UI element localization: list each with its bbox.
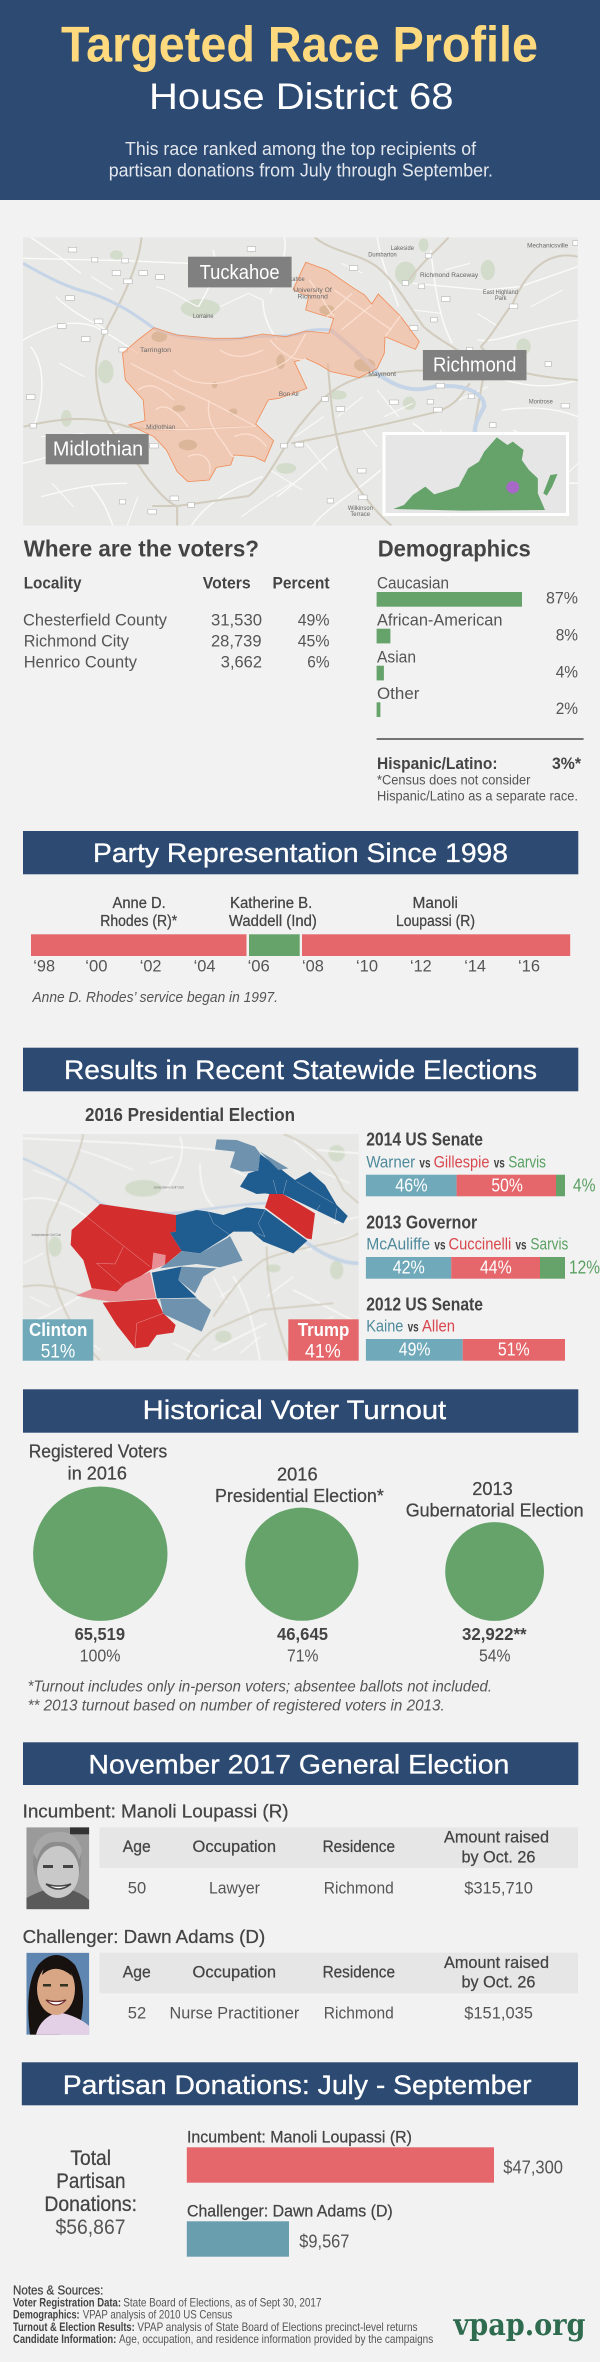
bar: challenger: Challenger: Dawn Adams (D)	[187, 2203, 393, 2221]
table header: by Oct. 26	[462, 1974, 535, 1992]
bubble: registered voters	[29, 1442, 168, 1666]
table header	[100, 1827, 578, 1868]
result: 2013 Governor: 2013 Governor	[366, 1212, 477, 1232]
map place names	[140, 243, 568, 518]
year axis: ‘10	[356, 957, 378, 976]
district outline	[122, 262, 419, 482]
map label: Richmond: Richmond	[433, 355, 516, 377]
map label: Richmond	[423, 350, 526, 380]
bubble: 2013 gubernatorial turnout: 54%	[479, 1646, 510, 1666]
bubble: 2016 presidential turnout: Presidential Election*	[215, 1486, 384, 1506]
map place names: East Highland	[483, 289, 518, 296]
bubble: registered voters: 100%	[80, 1646, 120, 1666]
notes and sources: Demographics:	[13, 2310, 80, 2322]
map place names: Montrose	[529, 399, 553, 406]
section heading: voter turnout: Historical Voter Turnout	[143, 1395, 447, 1425]
stacked bar: 49%	[399, 1340, 430, 1360]
inset: Virginia locator map	[384, 434, 568, 514]
table values: 50	[128, 1879, 146, 1897]
timeline chart: party representation	[31, 895, 570, 1006]
table rows: 6%	[307, 654, 330, 672]
map label: Tuckahoe: Tuckahoe	[200, 262, 280, 284]
total partisan donations: Total	[70, 2147, 111, 2170]
table header: Amount raised	[444, 1954, 549, 1972]
Hispanic/Latino note: 3%*	[552, 755, 582, 773]
section heading: statewide elections: Results in Recent Statewide Elections	[64, 1055, 537, 1085]
notes and sources: Candidate Information:	[13, 2334, 116, 2346]
map label: Midlothian: Midlothian	[53, 439, 143, 461]
table values: Lawyer	[209, 1879, 260, 1897]
candidates: vs	[419, 1154, 431, 1170]
map place names: Mechanicsville	[527, 243, 568, 250]
table rows: 45%	[298, 633, 330, 651]
Clinton result box: Clinton	[29, 1320, 87, 1340]
officeholder names: Manoli	[412, 895, 458, 912]
table values: $151,035	[464, 2005, 533, 2023]
total partisan donations	[44, 2147, 137, 2239]
table header	[24, 575, 330, 593]
year axis: ‘02	[140, 957, 162, 976]
section heading: voter turnout	[23, 1389, 578, 1433]
table values: Richmond	[324, 1879, 394, 1897]
candidate name: Challenger: Dawn Adams (D)	[23, 1926, 265, 1947]
map places: Independence Golf Club	[32, 1232, 62, 1237]
map place names: Lorraine	[193, 313, 214, 320]
year axis: ‘16	[518, 957, 540, 976]
Trump result box: 41%	[305, 1341, 341, 1362]
result: 2012 US Senate: 2012 US Senate	[366, 1294, 483, 1314]
bar chart: race: Asian	[377, 648, 416, 666]
notes and sources: Turnout & Election Results:	[13, 2322, 135, 2334]
table header: Percent	[272, 575, 330, 593]
notes and sources: Age, occupation, and residence information provided by the campaigns	[119, 2332, 433, 2346]
notes and sources: State Board of Elections, as of Sept 30, 2017	[123, 2295, 322, 2309]
total partisan donations: $56,867	[56, 2216, 126, 2239]
bubble: 2016 presidential turnout: 2016	[277, 1465, 318, 1485]
stacked bar	[366, 1339, 565, 1361]
notes and sources: Notes & Sources:	[13, 2283, 103, 2297]
candidates: vs	[516, 1237, 527, 1253]
officeholder names: Waddell (Ind)	[229, 913, 317, 930]
candidates: vs	[434, 1237, 446, 1253]
year axis: ‘00	[85, 957, 108, 976]
table header: Voters	[203, 575, 251, 593]
candidates: Kaine	[366, 1317, 403, 1336]
heading: Where are the voters?	[24, 536, 259, 562]
timeline bars	[31, 934, 570, 956]
map place names: Maymont	[368, 371, 396, 378]
map place names: Park	[495, 295, 507, 302]
table rows: 28,739	[211, 633, 262, 651]
bar chart: race: 87%	[546, 589, 578, 607]
section heading: statewide elections	[23, 1048, 578, 1091]
table values	[128, 1879, 533, 1897]
bubble: registered voters: 65,519	[75, 1624, 125, 1644]
officeholder names: Katherine B.	[230, 895, 312, 912]
map place names: Tuckahoe	[281, 276, 305, 283]
map place names: Dumbarton	[368, 252, 397, 259]
logo: vpap.org: vpap.org	[453, 2308, 586, 2343]
bar: incumbent: Incumbent: Manoli Loupassi (R)	[187, 2129, 412, 2147]
stacked bar: 50%	[491, 1175, 523, 1195]
turnout footnotes: *Turnout includes only in-person voters; absentee ballots not included.	[28, 1678, 492, 1695]
candidates: vs	[408, 1319, 419, 1335]
footnote: Anne D. Rhodes’ service began in 1997.	[32, 989, 278, 1006]
officeholder names	[100, 895, 475, 930]
year axis: ‘08	[302, 957, 324, 976]
bar chart: race	[377, 574, 578, 718]
map place names: Richmond	[297, 294, 328, 301]
Virginia shape	[393, 437, 557, 511]
candidates: Sarvis	[508, 1152, 546, 1171]
result: 2014 US Senate	[366, 1129, 596, 1196]
bubble: 2013 gubernatorial turnout: Gubernatorial Election	[406, 1500, 584, 1520]
district map	[23, 237, 578, 526]
table values: 52	[128, 2005, 146, 2023]
bar chart: partisan donations	[187, 2129, 563, 2257]
notes and sources: VPAP analysis of State Board of Elections precinct-level returns	[137, 2320, 418, 2334]
icon: incumbent portrait	[26, 1827, 89, 1909]
table header: Amount raised	[444, 1829, 549, 1847]
stacked bar	[366, 1257, 600, 1279]
bar chart: race: 8%	[556, 626, 578, 644]
intro text	[109, 138, 493, 180]
map places	[32, 1185, 185, 1237]
table rows: Henrico County	[24, 654, 138, 672]
Clinton-leaning precincts	[152, 1139, 348, 1332]
Trump-leaning precincts	[71, 1194, 315, 1348]
table header: Occupation	[192, 1838, 276, 1856]
candidates	[366, 1152, 546, 1171]
map label: Tuckahoe	[188, 257, 292, 287]
table values	[128, 2005, 533, 2023]
table header	[100, 1953, 578, 1993]
table rows: 49%	[298, 611, 330, 629]
table header: Age	[123, 1838, 151, 1856]
panel: where are the voters	[23, 536, 330, 672]
bubble: 2013 gubernatorial turnout: 32,922**	[462, 1624, 527, 1644]
map label: Midlothian	[46, 434, 149, 464]
table rows: 3,662	[221, 654, 262, 672]
panel: demographics	[377, 536, 584, 803]
candidates	[366, 1317, 455, 1336]
title: Targeted Race Profile	[61, 16, 538, 72]
map places: Jamestown Golf Club	[153, 1185, 185, 1190]
officeholder names: Loupassi (R)	[396, 913, 475, 930]
subtitle: district: House District 68	[149, 76, 454, 117]
total partisan donations: Partisan	[56, 2170, 125, 2193]
notes and sources: Voter Registration Data:	[13, 2297, 121, 2309]
heading: 2016 presidential election: 2016 Presidential Election	[85, 1104, 295, 1125]
year axis: ‘04	[194, 957, 216, 976]
bar: challenger	[187, 2203, 393, 2257]
candidate: incumbent	[23, 1801, 578, 1909]
stacked bar: 51%	[498, 1340, 530, 1360]
result: 2012 US Senate	[366, 1294, 565, 1361]
candidates: vs	[494, 1154, 505, 1170]
officeholder names: Rhodes (R)*	[100, 913, 177, 930]
Hispanic/Latino note	[377, 755, 582, 803]
candidate: challenger	[23, 1926, 578, 2035]
total partisan donations: Donations:	[44, 2193, 137, 2216]
notes and sources: VPAP analysis of 2010 US Census	[83, 2308, 232, 2322]
bubble: registered voters: Registered Voters	[29, 1442, 167, 1462]
precinct boundaries	[87, 1180, 337, 1348]
map place names: Terrace	[350, 511, 370, 518]
map place names: Wilkinson	[348, 505, 373, 512]
stacked bar: 44%	[480, 1258, 512, 1278]
candidates: Gillespie	[434, 1152, 490, 1171]
table header: Age	[123, 1964, 151, 1982]
map place names: University Of	[293, 287, 332, 294]
section heading: party representation: Party Representation Since 1998	[93, 838, 508, 868]
district marker	[506, 481, 519, 493]
Trump result box: Trump	[298, 1320, 349, 1340]
map place names: Lakeside	[391, 245, 414, 252]
Clinton result box	[23, 1319, 93, 1362]
section heading: general election	[23, 1742, 578, 1785]
year axis: ‘14	[464, 957, 486, 976]
table rows: Chesterfield County	[23, 611, 168, 629]
turnout footnotes	[28, 1678, 492, 1715]
table header: Residence	[323, 1838, 395, 1856]
section heading: partisan donations: Partisan Donations: July - September	[63, 2070, 532, 2100]
intro text: This race ranked among the top recipients of	[125, 138, 477, 159]
map place names: Tarrington	[140, 347, 171, 354]
year axis: ‘12	[410, 957, 432, 976]
table rows	[23, 611, 330, 672]
bar: incumbent: $47,300	[503, 2157, 563, 2177]
Hispanic/Latino note: Hispanic/Latino as a separate race.	[377, 788, 578, 803]
bar chart: race: Other	[377, 685, 420, 703]
stacked bar: 42%	[393, 1258, 425, 1278]
intro text: partisan donations from July through September.	[109, 160, 493, 180]
table rows: 31,530	[211, 611, 262, 629]
bar chart: race: 4%	[556, 663, 578, 681]
Clinton result box: 51%	[41, 1341, 75, 1362]
bar: incumbent	[187, 2129, 563, 2183]
candidates: Sarvis	[530, 1235, 568, 1254]
map place names: Bon Air	[279, 391, 300, 398]
table header: Occupation	[192, 1964, 276, 1982]
turnout footnotes: ** 2013 turnout based on number of registered voters in 2013.	[28, 1698, 445, 1715]
map place names: Richmond Raceway	[420, 272, 479, 279]
year axis: ‘06	[248, 957, 270, 976]
candidates: Allen	[422, 1317, 455, 1336]
bar chart: race: Caucasian	[377, 574, 449, 592]
bubble: 2013 gubernatorial turnout: 2013	[472, 1479, 513, 1499]
table values: $315,710	[464, 1879, 533, 1897]
header banner	[0, 0, 600, 200]
bar chart: race: African-American	[377, 611, 502, 629]
table header: Locality	[24, 575, 82, 593]
result: 2013 Governor	[366, 1212, 600, 1279]
year axis: ‘98	[33, 957, 55, 976]
bubble: registered voters: in 2016	[68, 1463, 127, 1483]
table header: Residence	[323, 1964, 395, 1982]
table values: Nurse Practitioner	[170, 2005, 300, 2023]
bar: challenger: $9,567	[299, 2231, 349, 2251]
stacked bar	[366, 1175, 596, 1196]
bubble: 2016 presidential turnout: 46,645	[277, 1624, 328, 1644]
section heading: party representation	[23, 831, 578, 874]
bubble: 2016 presidential turnout: 71%	[287, 1646, 318, 1666]
result: 2014 US Senate: 2014 US Senate	[366, 1129, 483, 1149]
precinct map: 2016 presidential	[23, 1134, 359, 1362]
bar chart: race: 2%	[556, 700, 578, 718]
candidates: Cuccinelli	[448, 1235, 511, 1254]
candidate name: Incumbent: Manoli Loupassi (R)	[23, 1801, 289, 1822]
stacked bar: 46%	[395, 1175, 428, 1195]
heading: Demographics	[378, 536, 531, 562]
icon: challenger portrait	[26, 1953, 89, 2035]
section heading: general election: November 2017 General Election	[88, 1750, 509, 1780]
table values: Richmond	[324, 2005, 394, 2023]
Hispanic/Latino note: *Census does not consider	[377, 772, 531, 787]
candidates	[366, 1235, 568, 1254]
officeholder names: Anne D.	[112, 895, 166, 912]
Hispanic/Latino note: Hispanic/Latino:	[377, 755, 498, 773]
candidates: McAuliffe	[366, 1235, 430, 1254]
table rows: Richmond City	[24, 633, 130, 651]
section heading: partisan donations	[22, 2062, 578, 2105]
stacked bar: 4%	[573, 1175, 596, 1195]
notes and sources	[13, 2283, 433, 2346]
bubble: 2013 gubernatorial turnout	[406, 1479, 584, 1666]
bubble: 2016 presidential turnout	[215, 1465, 384, 1666]
table header: by Oct. 26	[462, 1848, 535, 1866]
candidates: Warner	[366, 1152, 415, 1171]
year axis	[33, 957, 540, 976]
Trump result box	[288, 1319, 359, 1362]
map place names: Midlothian	[146, 424, 175, 431]
